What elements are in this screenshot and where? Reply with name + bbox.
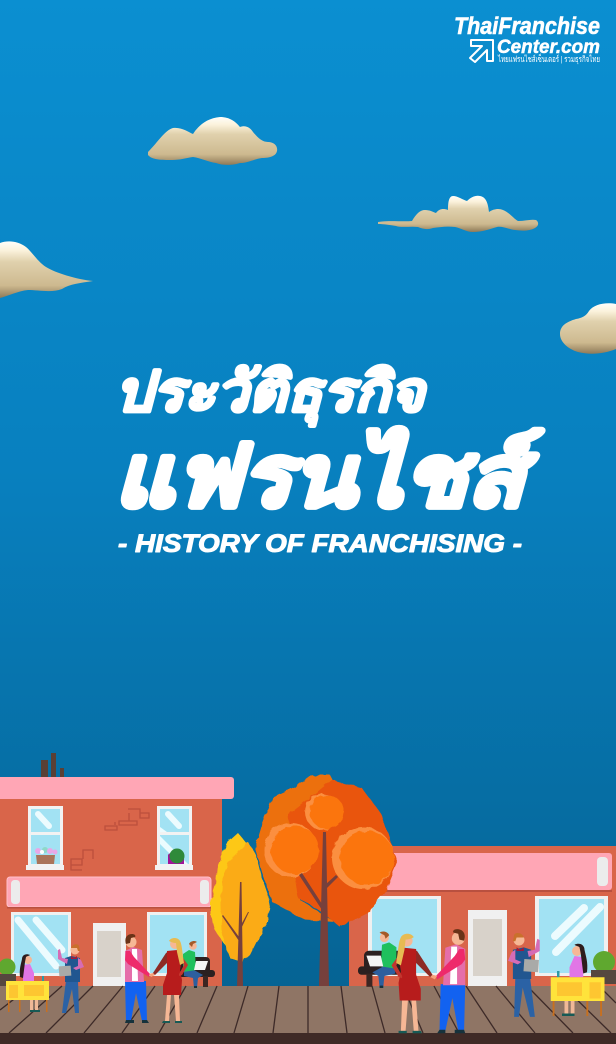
bush: right	[591, 951, 616, 984]
back foliage	[211, 833, 248, 962]
man on bench left	[177, 941, 215, 988]
title line 2: แฟรนไชส์	[114, 427, 545, 525]
shop door	[468, 910, 507, 986]
logo domain: Center.com	[497, 37, 600, 58]
title	[114, 360, 545, 558]
shop door	[93, 923, 126, 986]
upper window left	[26, 806, 64, 870]
roof	[0, 777, 234, 799]
tree: orange	[255, 775, 397, 986]
couple shaking hands right	[392, 929, 465, 1033]
logo wordmark: ThaiFranchise	[454, 13, 600, 40]
title line 1: ประวัติธุรกิจ	[115, 360, 427, 427]
shop sign	[7, 877, 211, 908]
back foliage	[255, 775, 338, 922]
upper window right	[155, 806, 193, 870]
plank seams	[0, 986, 616, 1033]
people: right	[358, 929, 604, 1033]
cloud: upper right	[378, 196, 538, 232]
shop window left	[368, 896, 441, 976]
waiter right	[508, 933, 540, 1017]
shop window right	[535, 896, 608, 976]
couple shaking hands left	[125, 934, 188, 1023]
cloud: right edge	[560, 303, 616, 354]
brick marks	[71, 809, 149, 870]
people: left	[6, 934, 215, 1023]
shop window right	[147, 912, 207, 976]
bush: left	[0, 958, 16, 986]
man on bench right	[358, 932, 404, 988]
shop window left	[11, 912, 71, 976]
boardwalk	[0, 986, 616, 1044]
trunk	[299, 832, 338, 986]
wall	[349, 846, 616, 988]
building: right	[349, 846, 616, 988]
logo: ThaiFranchise Center.com	[454, 13, 600, 65]
front foliage	[288, 780, 397, 927]
waiter left	[58, 944, 84, 1013]
fruit clusters	[264, 794, 394, 889]
cloud: top centre	[148, 117, 277, 165]
trunk	[222, 882, 249, 986]
subtitle: - HISTORY OF FRANCHISING -	[118, 530, 522, 558]
chimneys	[41, 753, 64, 777]
logo arrow icon	[470, 40, 493, 62]
curb	[0, 1033, 616, 1044]
seated diner left	[6, 954, 49, 1012]
front foliage	[221, 842, 270, 962]
shop sign	[370, 853, 612, 892]
planks	[0, 986, 616, 1034]
flower box	[35, 847, 58, 864]
cloud: left edge	[0, 241, 93, 298]
wall	[0, 798, 222, 988]
building: left	[0, 753, 234, 988]
tree: yellow	[211, 833, 270, 986]
seated diner right	[551, 944, 604, 1016]
potted plant	[168, 848, 184, 864]
